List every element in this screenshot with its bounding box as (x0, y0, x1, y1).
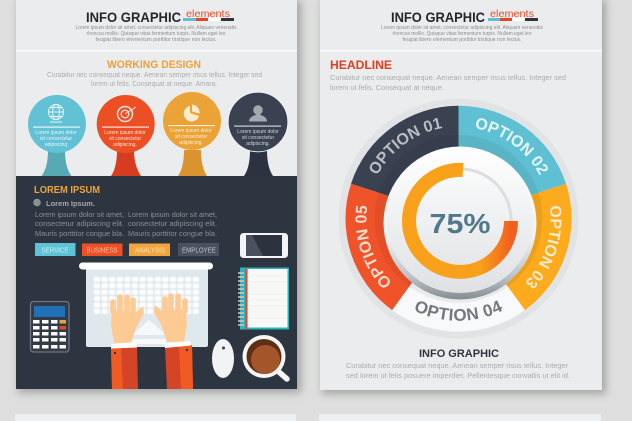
title: left: INFO GRAPHIC (86, 9, 181, 25)
card: blue: adipiscing (45, 142, 67, 148)
icon: target (118, 106, 136, 122)
title accent: elements: elements (186, 8, 230, 20)
headline text (330, 73, 566, 92)
label: option 03: OPTION 03 (526, 206, 562, 288)
card: dark (228, 92, 288, 176)
panel: left poster shadow (18, 0, 301, 393)
card: dark: Lorem ipsum dolor (237, 129, 279, 135)
panel: lower left poster (15, 414, 296, 421)
footer text: Curabitur nec consequat neque. Aenean semper risus tellus. Integer (346, 363, 569, 370)
card: orange: adipiscing. (179, 140, 203, 146)
footer text: sed lorem ut felis posuere imperdiet. Pellentesque convallis ut elit id. (346, 373, 570, 380)
segment: option 03 (458, 184, 572, 310)
bullet: Lorem Ipsum. (46, 199, 95, 208)
heading: lorem ipsum: LOREM IPSUM (34, 185, 100, 196)
headline text: lorem ut felis. Consequat at neque. (330, 83, 444, 92)
text columns: Lorem ipsum dolor sit amet, (35, 210, 124, 219)
card: dark: sit consectetur (242, 135, 274, 141)
text columns: Mauris porttitor congue bla. (128, 229, 217, 238)
card: orange: Lorem ipsum dolor (170, 128, 212, 134)
icon: person (249, 105, 267, 122)
value: 75%: 75% (430, 208, 491, 239)
card: red (97, 95, 155, 176)
icon: laptop (79, 262, 213, 347)
tags (35, 243, 219, 256)
icon: coffee cup (242, 335, 287, 379)
segment: option 01 (351, 106, 458, 219)
card: dark: adipiscing. (246, 141, 270, 147)
panel: lower right poster (319, 414, 601, 421)
segment: option 02 (458, 106, 566, 219)
intro text: rhoncus mollis. Quisque vitae fermentum turpis. Nullam eget leo (392, 31, 532, 37)
tags: SERVICE (42, 248, 69, 254)
icon: right sleeve (164, 341, 193, 389)
card: blue: sit consectetur (40, 136, 72, 142)
working design text (47, 70, 262, 88)
label: option 02: OPTION 02 (476, 118, 548, 176)
heading: headline: HEADLINE (330, 58, 392, 72)
donut chart (338, 99, 578, 338)
text columns: Lorem ipsum dolor sit amet, (128, 210, 217, 219)
working design text: Curabitur nec consequat neque. Aenean semper risus tellus. Integer sed (47, 70, 262, 79)
working design text: lorem ut felis. Consequat at neque. Amara. (91, 79, 217, 88)
intro text (381, 25, 543, 43)
label: option 04: OPTION 04 (416, 300, 502, 321)
tags: BUSINESS (86, 248, 118, 254)
label: option 05: OPTION 05 (355, 206, 390, 288)
icon: pie chart (184, 104, 200, 121)
heading: working design: WORKING DESIGN (107, 59, 201, 71)
text columns: Mauris porttitor congue bla. (35, 229, 124, 238)
intro text: Lorem ipsum dolor sit amet, consectetur adipiscing elit. Aliquam venenatis (76, 25, 237, 31)
progress ring track (463, 169, 511, 221)
segment: option 04 (392, 219, 525, 332)
card: blue: Lorem ipsum dolor (35, 130, 77, 136)
icon: phone (240, 233, 288, 258)
icon: left sleeve (111, 342, 138, 389)
card: red: Lorem ipsum dolor (104, 130, 146, 136)
progress ring 75% (409, 170, 511, 272)
panel: dark workspace (16, 176, 297, 389)
panel: right poster shadow (322, 0, 606, 394)
center disc (384, 146, 536, 300)
intro text: feugiat libero elementum porttitor tristique non lectus. (402, 37, 522, 43)
headline text: Curabitur nec consequat neque. Aenean semper risus tellus. Integer sed (330, 73, 566, 82)
label: option 01: OPTION 01 (370, 118, 442, 174)
segment: option 05 (345, 184, 458, 310)
card: red: adipiscing. (113, 142, 137, 148)
tags: ANALYSIS (135, 248, 165, 254)
icon: notebook (238, 268, 289, 330)
panel: left poster (16, 0, 297, 389)
card: orange: sit consectetur (175, 134, 207, 140)
heading: info graphic: INFO GRAPHIC (419, 348, 499, 360)
text columns: consectetur adipiscing elit. (35, 219, 124, 228)
title: right: INFO GRAPHIC (391, 9, 485, 25)
icon: calculator (30, 302, 69, 352)
intro text: feugiat libero elementum porttitor tristique non lectus. (96, 37, 216, 43)
text columns: consectetur adipiscing elit. (128, 219, 217, 228)
icon: right hand (154, 296, 187, 342)
panel: right poster (320, 0, 602, 390)
card: blue (28, 95, 86, 176)
tags: EMPLOYEE (182, 248, 216, 254)
intro text: Lorem ipsum dolor sit amet, consectetur adipiscing elit. Aliquam venenatis (381, 25, 543, 31)
title accent: elements: elements (490, 8, 534, 20)
text columns (35, 210, 217, 238)
card: orange (163, 92, 221, 176)
card: red: sit consectetur (109, 136, 141, 142)
intro text (76, 25, 237, 43)
icon: mouse (212, 339, 234, 378)
intro text: rhoncus mollis. Quisque vitae fermentum turpis. Nullam eget leo (86, 31, 226, 37)
footer text (346, 363, 570, 380)
icon: left hand (111, 297, 144, 343)
icon: globe (48, 104, 64, 122)
